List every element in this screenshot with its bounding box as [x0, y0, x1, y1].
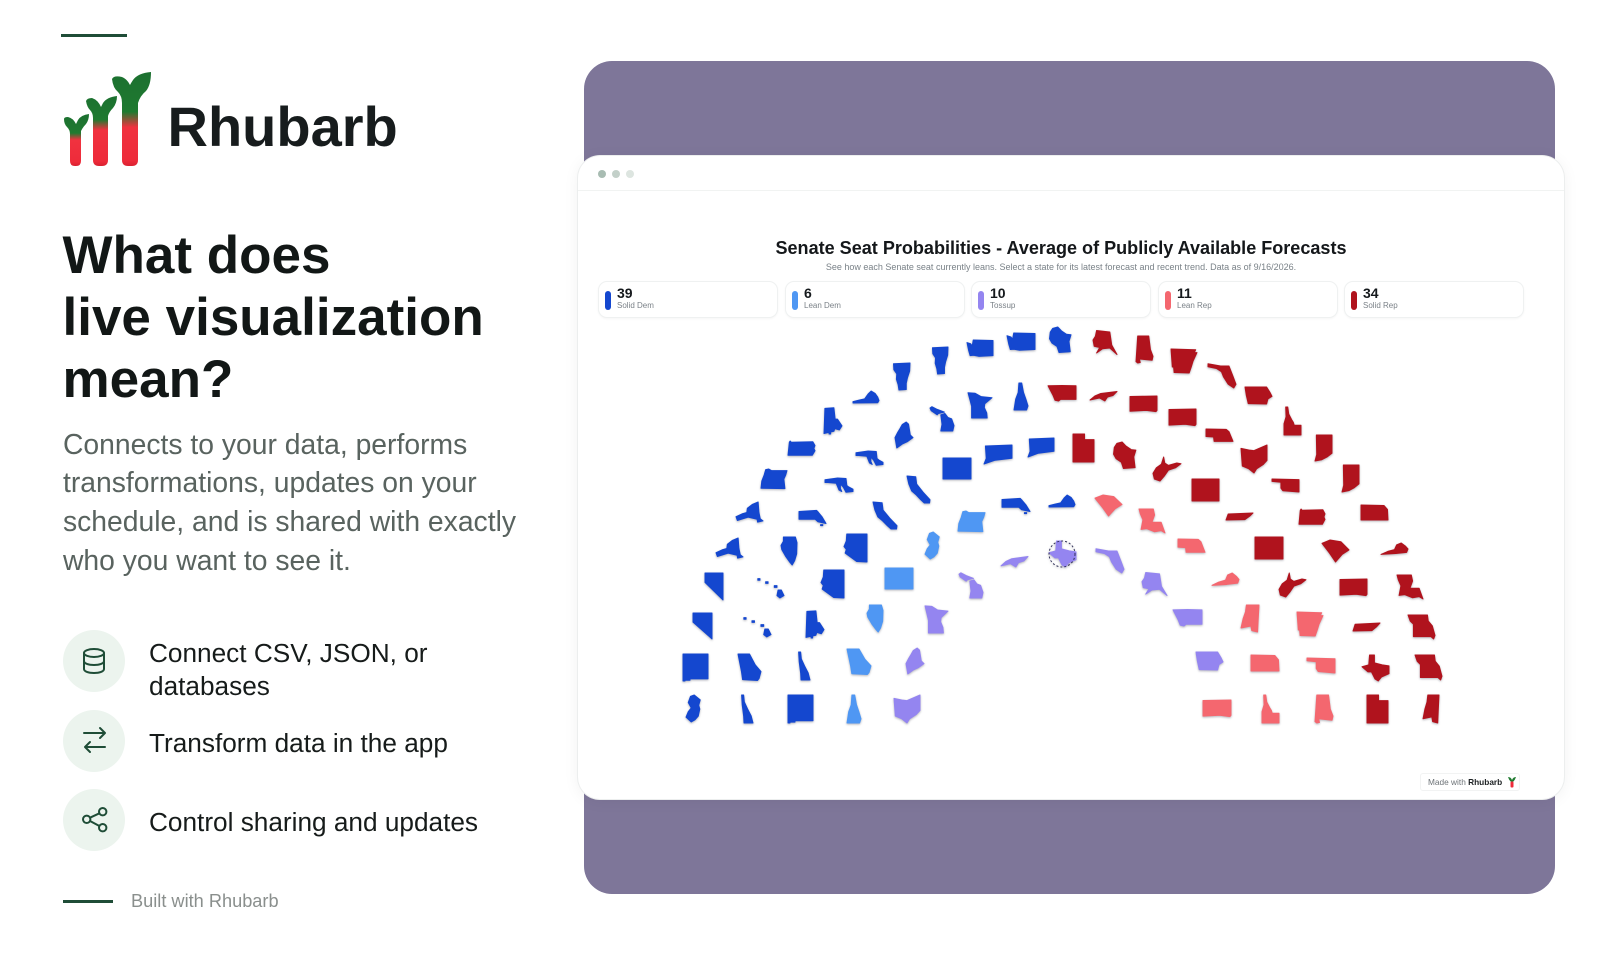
- stat: tossup: [971, 281, 1151, 318]
- stat: lean rep: Lean Rep: [1177, 301, 1212, 310]
- feature text: Control sharing and updates: [149, 807, 478, 837]
- chart: senate seat hemicycle of state shapes: [681, 326, 1444, 726]
- stat: lean dem: [785, 281, 965, 318]
- seats: solid Republican: [1048, 330, 1442, 723]
- panel: purple backdrop: [584, 61, 1555, 894]
- description text: who you want to see it.: [63, 544, 351, 576]
- stat: lean dem: 6: [804, 285, 812, 301]
- feature: connect: [63, 630, 428, 701]
- stat: lean dem: Lean Dem: [804, 301, 841, 310]
- stat: solid rep: 34: [1363, 285, 1379, 301]
- feature: transform: [63, 710, 448, 772]
- heading: live visualization: [62, 288, 484, 347]
- stat: lean rep: [1158, 281, 1338, 318]
- stat: solid dem: [598, 281, 778, 318]
- footer rule: [63, 900, 113, 902]
- heading: mean?: [62, 350, 233, 409]
- brand name: Rhubarb: [168, 95, 398, 158]
- seats: tossup: [894, 541, 1223, 723]
- panel: browser window: [578, 156, 1564, 799]
- seats: solid Democratic: [683, 327, 1075, 723]
- stat: tossup: Tossup: [990, 301, 1015, 310]
- description text: transformations, updates on your: [63, 466, 477, 498]
- stat: lean rep: 11: [1177, 285, 1192, 301]
- icon: small logo: [1508, 777, 1516, 788]
- stat: solid dem: 39: [617, 285, 633, 301]
- feature text: [149, 638, 428, 701]
- feature text: databases: [149, 671, 270, 701]
- icon: database: [63, 630, 125, 692]
- heading: [62, 226, 484, 409]
- selected seat dashed ring: [1049, 541, 1075, 567]
- icon: transform arrows: [63, 710, 125, 772]
- seats: lean Republican: [1095, 495, 1335, 723]
- heading: What does: [62, 226, 330, 285]
- stat: solid rep: [1344, 281, 1524, 318]
- icon: share: [63, 789, 125, 851]
- stat: tossup: 10: [990, 285, 1006, 301]
- seats: lean Democratic: [847, 511, 985, 723]
- made with rhubarb badge: [1420, 773, 1520, 791]
- icon: rhubarb logo: [64, 72, 151, 166]
- top accent rule: [61, 34, 127, 36]
- feature text: Connect CSV, JSON, or: [149, 638, 427, 668]
- feature: share: [63, 789, 478, 851]
- footer text: Built with Rhubarb: [131, 891, 279, 911]
- description text: [63, 428, 516, 576]
- description text: schedule, and is shared with exactly: [63, 505, 516, 537]
- window header with dots: [578, 156, 1564, 191]
- stat: solid rep: Solid Rep: [1363, 301, 1398, 310]
- dashboard subtitle: See how each Senate seat currently leans. Select a state for its latest forecast and recent trend. Data as of 9/16/2026.: [826, 262, 1296, 272]
- description text: Connects to your data, performs: [63, 428, 467, 460]
- dashboard title: Senate Seat Probabilities - Average of Publicly Available Forecasts: [775, 238, 1347, 258]
- stat: solid dem: Solid Dem: [617, 301, 654, 310]
- made with rhubarb badge: Made with Rhubarb: [1428, 777, 1502, 787]
- feature text: Transform data in the app: [149, 728, 448, 758]
